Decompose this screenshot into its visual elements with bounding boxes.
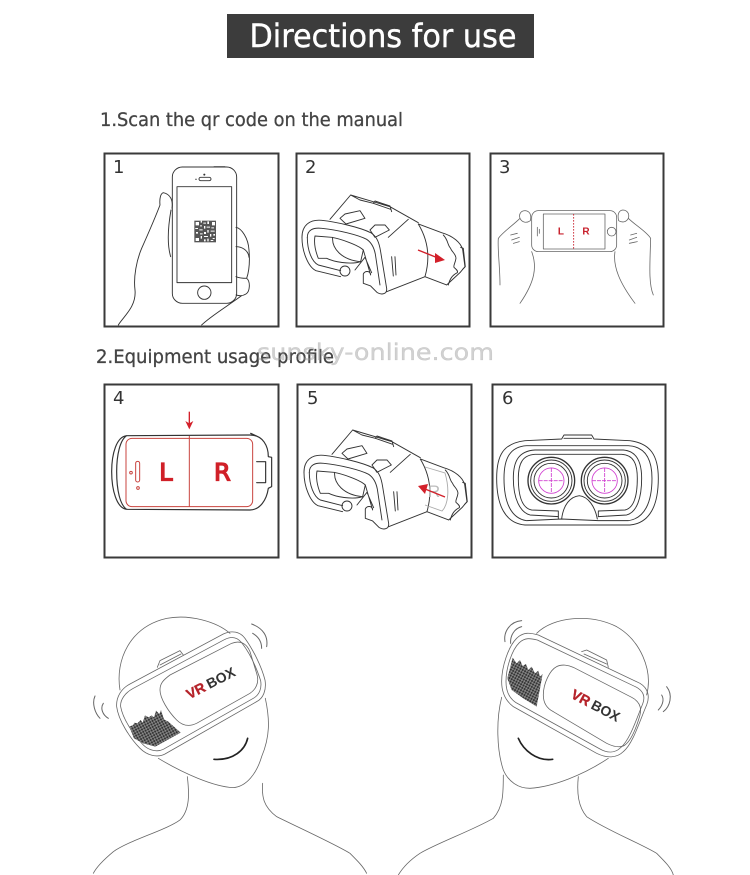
icon: phone xyxy=(172,167,237,303)
panel 5: insert phone into headset xyxy=(298,384,472,558)
panel 5: insert phone into headset: 5 xyxy=(307,388,318,409)
icon: headset with phone inserted: R xyxy=(428,482,440,501)
icon: headset front frame xyxy=(497,435,658,525)
panel 3: phone landscape with L and R: 3 xyxy=(499,157,510,178)
icon: hand holding phone xyxy=(118,193,249,325)
icon: phone outline in red xyxy=(126,436,253,507)
arrow: red right xyxy=(418,250,445,263)
logo: VR BOX: BOX xyxy=(589,696,623,725)
icon: tilted headset xyxy=(502,633,648,757)
panel 1: scan qr code with phone xyxy=(104,154,278,326)
title: Directions for use xyxy=(250,17,516,55)
panel 2: open VR headset, arrow pointing out: 2 xyxy=(305,157,316,178)
illustration: head wearing headset tilted left xyxy=(93,617,367,873)
icon: motion waves right xyxy=(252,624,267,648)
icon: smile xyxy=(214,738,248,759)
icon: phone outline in red: R xyxy=(214,458,231,486)
icon: motion waves right xyxy=(658,687,670,712)
icon: head and shoulders xyxy=(93,617,367,873)
icon: tilted headset xyxy=(117,632,265,756)
icon: headset side view xyxy=(302,195,465,294)
panel 4: phone placed in tray with L and R xyxy=(104,384,278,558)
logo: VR BOX: VR xyxy=(569,686,593,709)
logo: VR BOX: BOX xyxy=(204,663,238,692)
icon: phone outline in red: L xyxy=(159,458,173,486)
icon: landscape phone xyxy=(532,211,617,252)
icon: right hand xyxy=(615,210,653,303)
logo: VR BOX xyxy=(183,663,238,702)
icon: left hand xyxy=(498,211,534,303)
panel 1: scan qr code with phone: 1 xyxy=(113,157,124,178)
panel 6: headset front with lens crosshairs: 6 xyxy=(502,388,513,409)
panel 3: phone landscape with L and R xyxy=(490,154,664,326)
icon: tray outline xyxy=(112,433,272,510)
panel 6: headset front with lens crosshairs xyxy=(492,384,666,558)
icon: head and shoulders xyxy=(398,618,673,875)
illustration: head wearing headset tilted right xyxy=(398,618,673,875)
icon: landscape phone: L xyxy=(558,226,564,237)
heading: equipment usage step: 2.Equipment usage profile xyxy=(96,346,334,368)
icon: smile xyxy=(518,738,553,760)
logo: VR BOX xyxy=(569,686,623,725)
watermark: sunsky-online.com xyxy=(257,340,494,366)
heading: scan step: 1.Scan the qr code on the manual xyxy=(100,109,403,131)
panel 2: open VR headset, arrow pointing out xyxy=(296,154,470,326)
panel 4: phone placed in tray with L and R: 4 xyxy=(113,388,124,409)
icon: right lens xyxy=(581,457,628,504)
icon: motion waves left xyxy=(94,696,108,718)
icon: qr code xyxy=(194,221,216,242)
logo: VR BOX: VR xyxy=(183,679,208,702)
icon: landscape phone: R xyxy=(582,226,590,237)
icon: motion waves left xyxy=(505,621,522,643)
icon: left lens xyxy=(528,457,575,504)
icon: headset with phone inserted xyxy=(304,430,467,529)
arrow: red left xyxy=(418,484,445,497)
arrow: red down xyxy=(185,412,193,429)
